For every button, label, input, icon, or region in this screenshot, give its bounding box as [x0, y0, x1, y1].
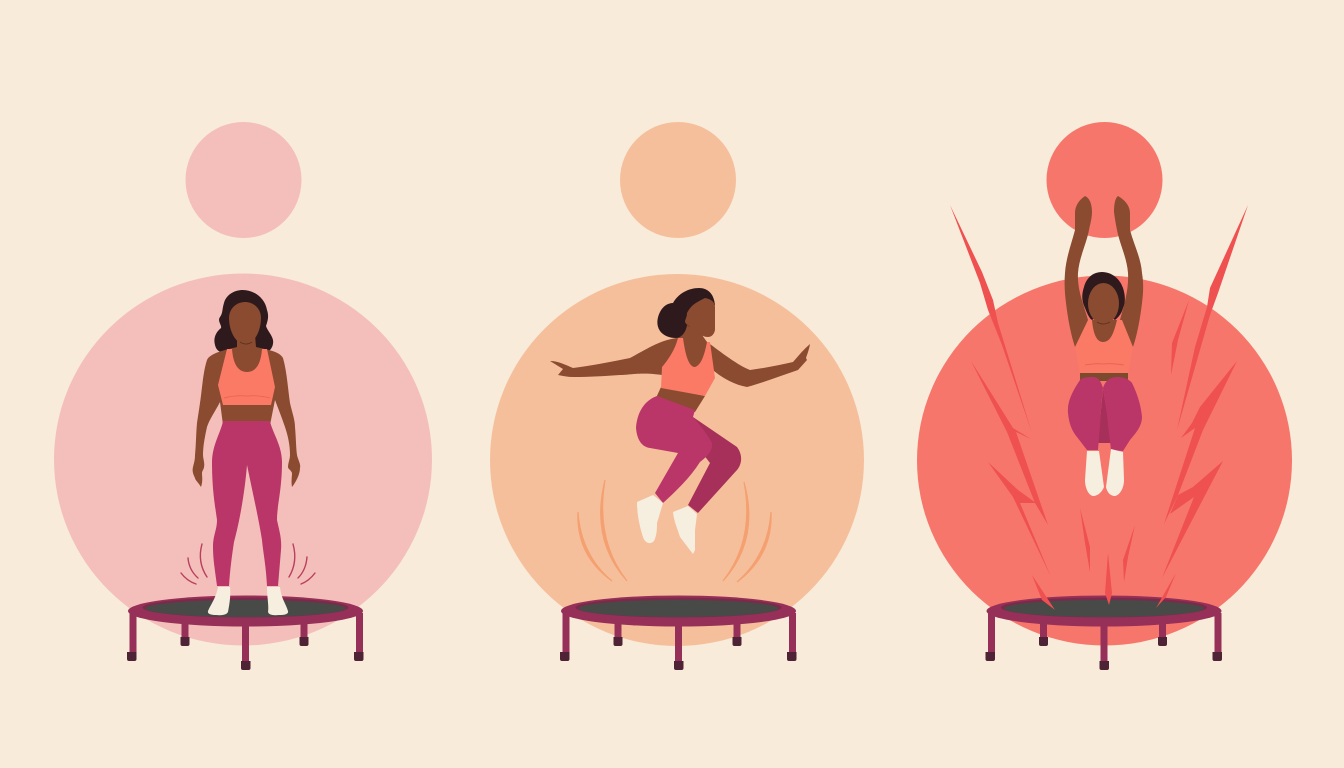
chin line: [240, 342, 252, 344]
hair: [214, 290, 273, 352]
leggings: [212, 421, 282, 586]
sports top: [218, 349, 275, 405]
large circle 3: [917, 276, 1292, 646]
trampoline 3: [986, 596, 1222, 670]
stage 3: intense jump: [917, 122, 1292, 670]
socks: [637, 495, 697, 554]
trampoline 2: [560, 596, 796, 670]
lightning bolts: [950, 205, 1248, 610]
face: [685, 298, 715, 337]
face: [229, 302, 261, 344]
large circle 1: [54, 274, 432, 646]
socks: [1085, 449, 1124, 496]
small indicator circle 2: [620, 122, 736, 238]
face: [1088, 283, 1119, 324]
motion arcs under the jump: [578, 480, 771, 582]
sports top: [1075, 320, 1133, 373]
arms, neck and chest: [550, 325, 810, 395]
jumping figure: [550, 288, 810, 554]
far leg: [688, 417, 741, 513]
hair and bun: [657, 288, 715, 338]
arms, shoulders and midriff: [193, 335, 300, 487]
top hem: [1085, 364, 1124, 365]
trampoline 1: [127, 596, 364, 670]
standing figure: [193, 290, 300, 615]
near leg: [636, 396, 712, 503]
motion arcs around the feet: [181, 544, 315, 584]
top hem: [224, 396, 270, 398]
stage 2: mid-air jump: [490, 122, 864, 670]
socks: [208, 587, 288, 615]
shadow between the legs: [1098, 388, 1112, 443]
chin line: [1097, 322, 1110, 324]
midriff: [1080, 373, 1128, 381]
sports top: [661, 338, 715, 396]
leggings knees: [1068, 377, 1142, 451]
stage 1: gentle bounce: [54, 122, 432, 670]
large circle 2: [490, 274, 864, 646]
hair: [1082, 272, 1125, 320]
small indicator circle 3: [1046, 122, 1162, 238]
arms raised figure: [1065, 196, 1143, 496]
midriff: [656, 387, 705, 412]
arms and shoulders: [1065, 196, 1143, 347]
small indicator circle 1: [186, 122, 302, 238]
